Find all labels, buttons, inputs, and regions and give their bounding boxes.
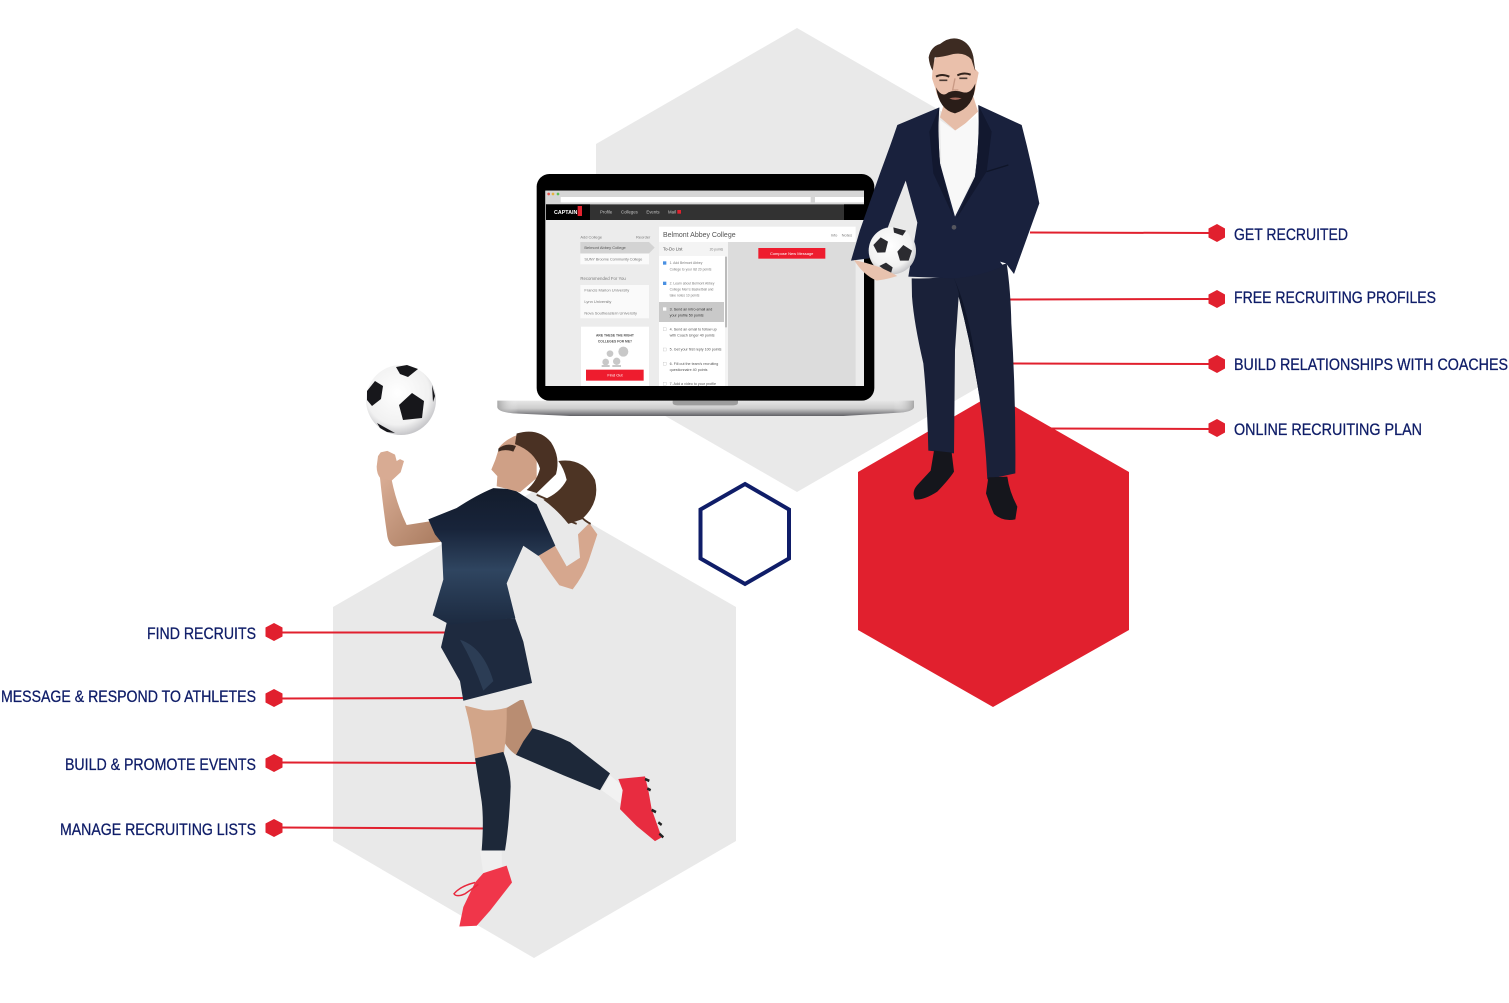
app screen: Info <box>831 232 838 237</box>
beard <box>936 83 975 113</box>
app screen: Profile <box>600 209 613 214</box>
app screen: Reorder <box>636 235 651 240</box>
back sock <box>516 728 610 790</box>
app screen: CAPTAIN <box>554 210 577 216</box>
back boot <box>618 776 662 841</box>
trousers <box>912 263 1015 479</box>
face shadow <box>498 445 516 452</box>
front boot <box>459 866 512 927</box>
app screen: Recommended For You <box>580 276 626 281</box>
trouser fold shading <box>953 277 979 397</box>
back thigh <box>502 700 533 756</box>
ball under arm <box>869 227 916 274</box>
app screen: College Men's Basketball and <box>670 287 714 291</box>
back boot studs <box>645 779 663 837</box>
label: build and promote events: BUILD & PROMOTE EVENTS <box>65 755 256 774</box>
eyes <box>939 78 967 80</box>
laptop base <box>497 401 914 416</box>
shorts <box>441 618 532 701</box>
shorts highlight <box>460 640 493 691</box>
standing thigh <box>465 706 507 758</box>
hand <box>854 260 897 281</box>
back white sock <box>602 775 624 803</box>
chest pocket <box>987 165 1008 172</box>
marker: free recruiting profiles <box>1208 290 1225 308</box>
app screen: Notes <box>842 232 852 237</box>
laptop bezel <box>537 174 874 401</box>
marker: get recruited <box>1208 224 1225 242</box>
outlined navy hexagon <box>700 484 789 584</box>
app screen: To-Do List <box>663 247 683 252</box>
app screen: Mail <box>668 209 676 214</box>
nose <box>953 78 958 90</box>
app screen: 5. Get your first reply 100 points <box>670 348 722 352</box>
background hexagon: bottom grey <box>333 491 736 958</box>
undershorts <box>465 691 523 710</box>
app screen: Events <box>646 209 660 214</box>
face <box>932 50 979 112</box>
laptop with recruiting app screen <box>497 174 914 416</box>
label: online recruiting plan: ONLINE RECRUITING PLAN <box>1234 420 1422 439</box>
app screen: SUNY Broome Community College <box>584 256 643 261</box>
app screen: questionnaire 40 points <box>670 368 708 372</box>
app screen: Colleges <box>621 209 638 214</box>
shirt <box>940 116 979 217</box>
neck and face <box>491 435 537 492</box>
app screen: 7. Add a video to your profile <box>670 382 716 386</box>
app screen: 6. Fill out the team's recruiting <box>670 362 718 366</box>
brows and eyes <box>936 73 971 77</box>
connector lines: right <box>1005 232 1212 429</box>
background hexagon: red <box>858 394 1129 707</box>
marker: build and promote events <box>266 754 282 772</box>
app screen: 3. Send an intro email and <box>670 307 712 311</box>
raised hand <box>377 451 404 481</box>
label: get recruited: GET RECRUITED <box>1234 225 1348 244</box>
label: free recruiting profiles: FREE RECRUITING PROFILES <box>1234 288 1436 307</box>
app screen: Find Out <box>607 373 624 378</box>
app screen: COLLEGES FOR ME? <box>598 339 632 343</box>
app screen: Add College <box>580 235 603 240</box>
marker: find recruits <box>266 623 282 641</box>
marker: online recruiting plan <box>1208 419 1225 437</box>
background hexagon: top grey <box>596 28 998 492</box>
hair <box>515 432 558 493</box>
jacket <box>851 105 1039 278</box>
app screen: College to your list 20 points <box>670 267 712 271</box>
app screen: Nova Southeastern University <box>584 310 637 315</box>
female soccer player jumping <box>377 432 663 927</box>
boot lace <box>454 883 478 896</box>
standing white sock <box>480 851 502 874</box>
marker: manage recruiting lists <box>266 819 282 837</box>
label: message and respond to athletes: MESSAGE & RESPOND TO ATHLETES <box>1 687 256 706</box>
lapels <box>929 105 992 218</box>
app screen: take notes 10 points <box>670 293 700 297</box>
raised arm <box>380 478 441 546</box>
ponytail wisps <box>537 495 591 524</box>
app screen: 20 points <box>710 247 724 251</box>
app screen: Francis Marion University <box>584 288 629 293</box>
connector lines: left <box>280 632 486 828</box>
app screen: Lynn University <box>584 299 611 304</box>
ponytail <box>543 460 596 524</box>
app screen: your profile 50 points <box>670 314 704 318</box>
app screen: Belmont Abbey College <box>584 245 627 250</box>
left shoe <box>914 451 954 500</box>
app screen: with Coach Unger 40 points <box>670 334 715 338</box>
marker: message and respond <box>266 689 282 707</box>
marker: build relationships <box>1208 355 1225 373</box>
man in suit holding a ball <box>851 38 1039 520</box>
app screen: ARE THESE THE RIGHT <box>596 333 634 337</box>
hair <box>929 38 975 71</box>
app screen: 2. Learn about Belmont Abbey <box>670 281 715 285</box>
app screen <box>545 191 864 386</box>
neck <box>940 97 978 132</box>
label: find recruits: FIND RECRUITS <box>147 624 256 643</box>
shin sleeve <box>475 752 511 851</box>
app screen: 4. Send an email to follow up <box>670 328 717 332</box>
jersey <box>428 488 555 625</box>
app screen: Compose New Message <box>770 251 814 256</box>
button <box>952 225 956 230</box>
app screen: 1. Add Belmont Abbey <box>670 261 703 265</box>
label: manage recruiting lists: MANAGE RECRUITING LISTS <box>60 820 256 839</box>
other arm <box>538 523 597 589</box>
app screen: Belmont Abbey College <box>663 232 736 239</box>
mouth <box>949 97 962 100</box>
soccer ball in the air <box>366 365 436 435</box>
right shoe <box>986 477 1017 520</box>
